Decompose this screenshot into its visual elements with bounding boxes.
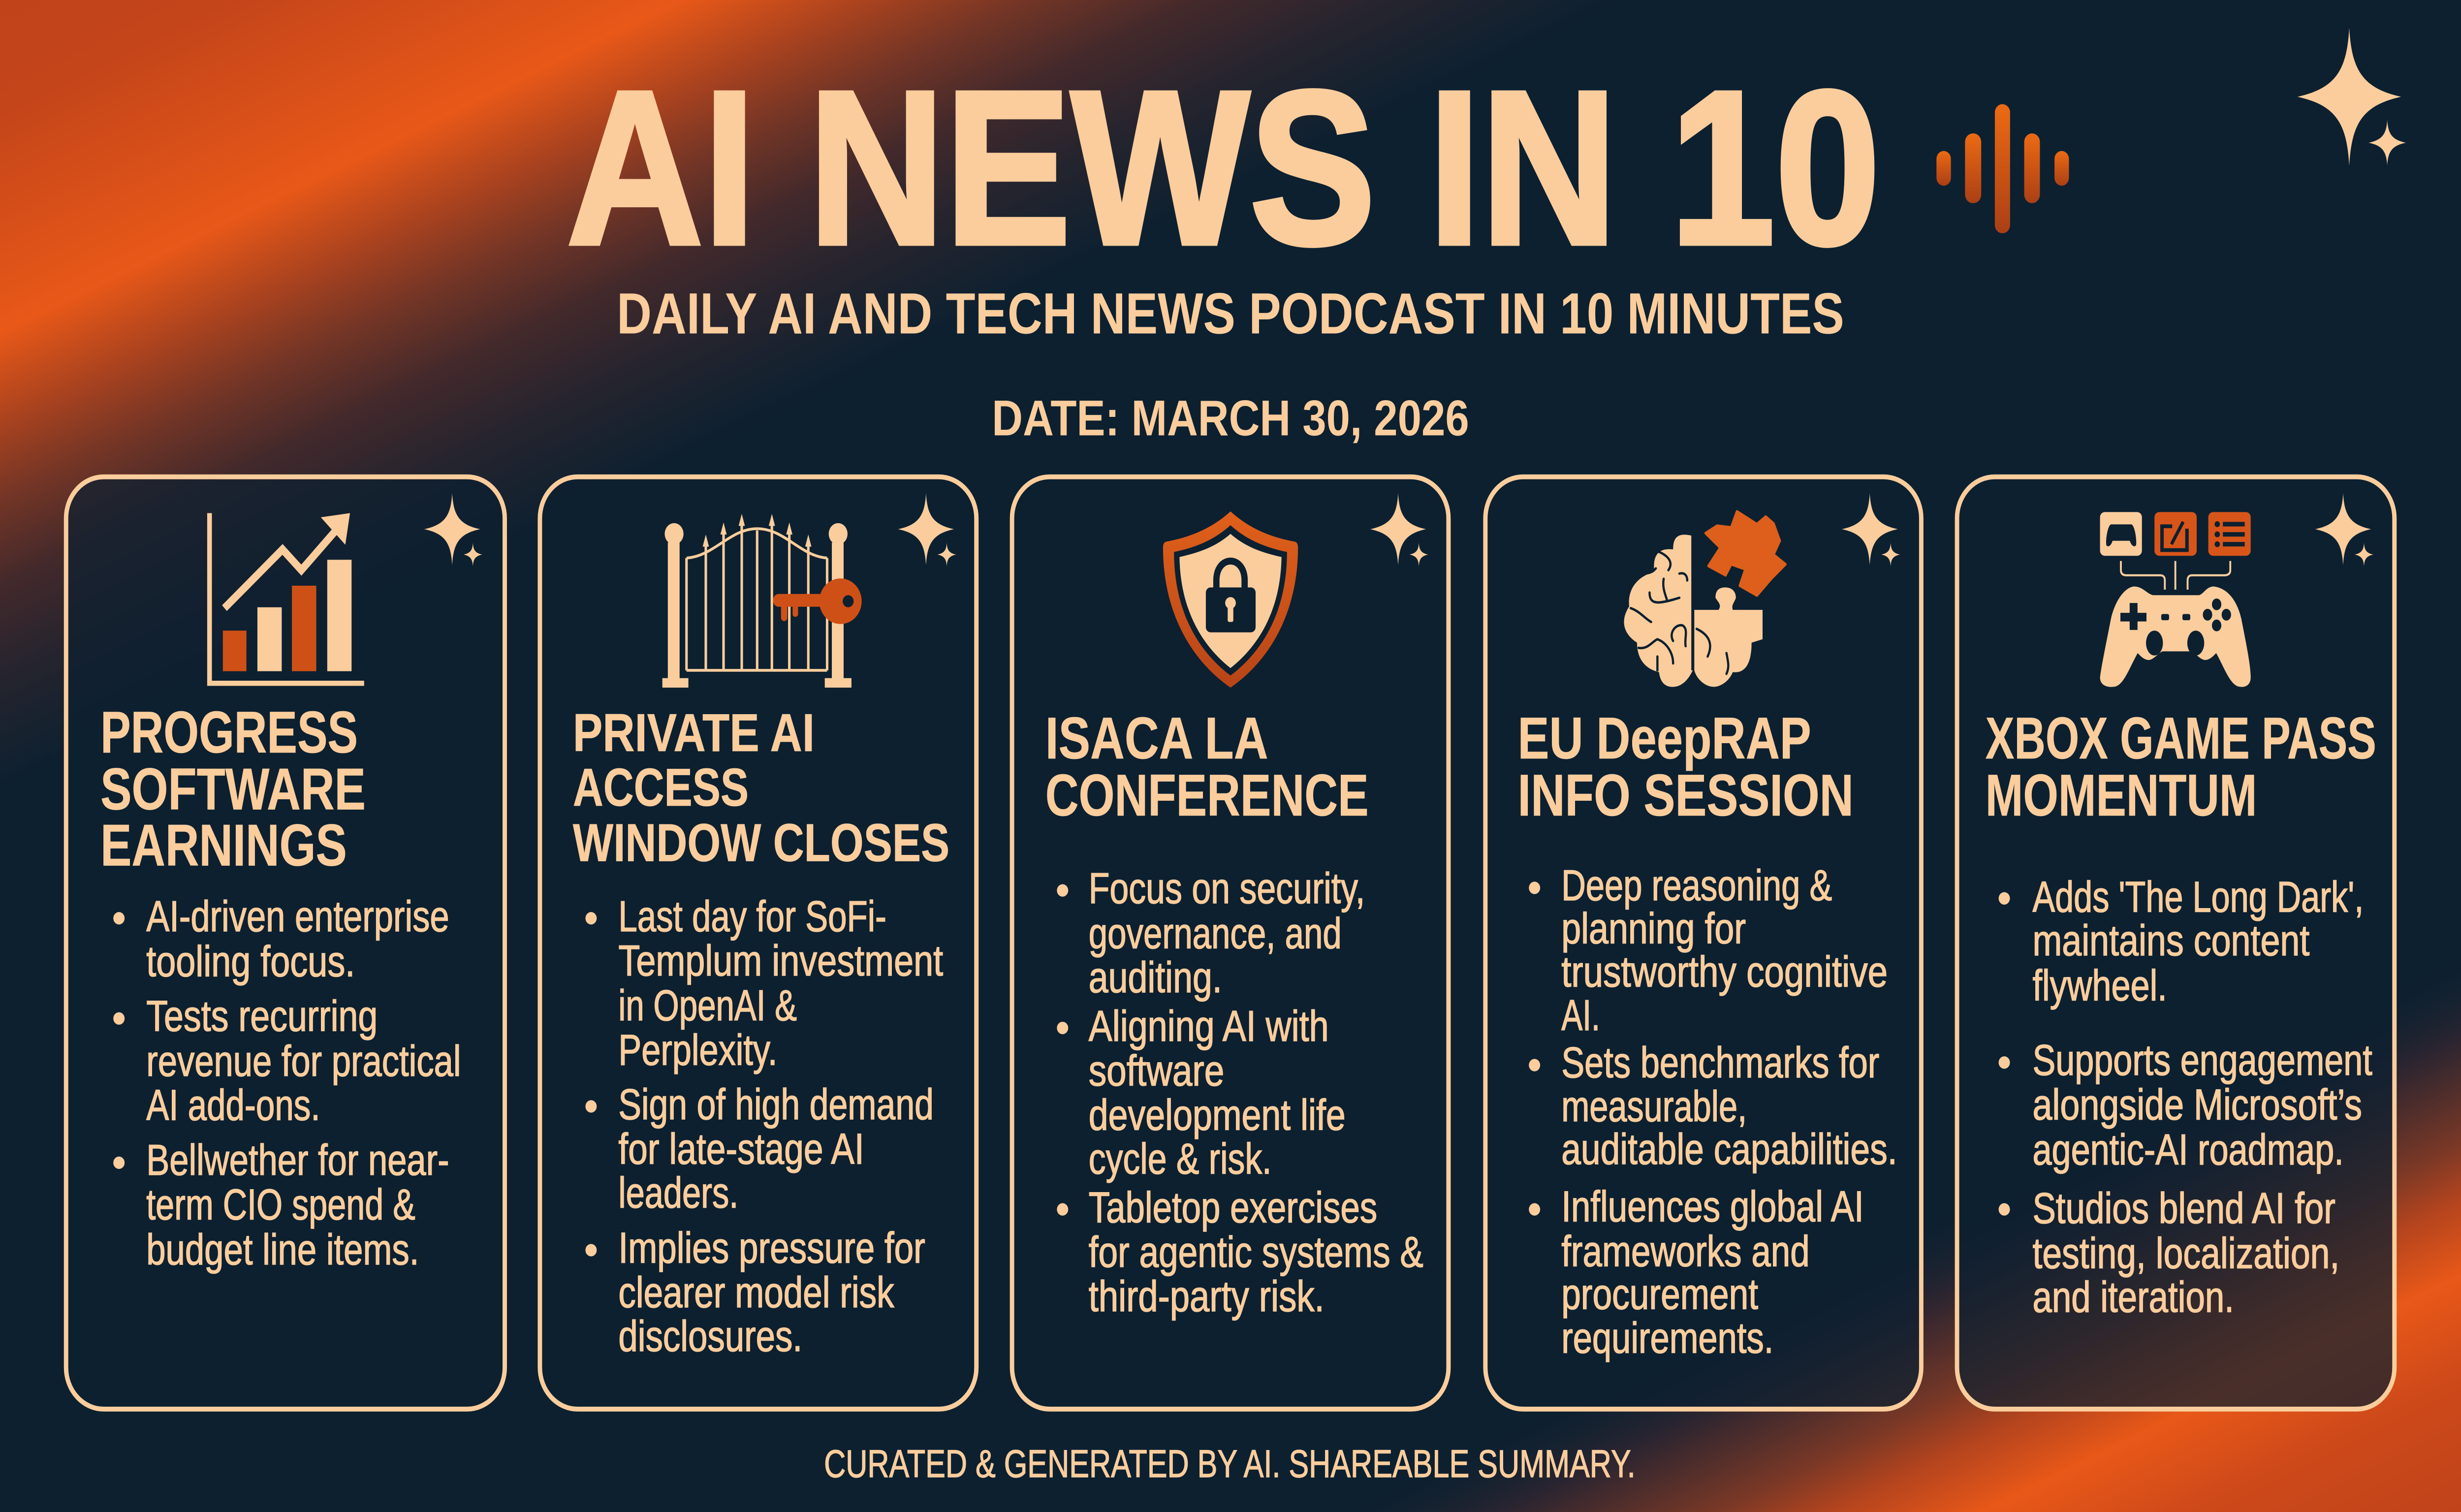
card frame [1012,477,1449,1409]
card frame [540,477,977,1409]
title: AI NEWS IN 10 [567,45,1880,290]
heading [1518,706,1854,828]
panel: Xbox Game Pass momentum [1957,477,2395,1409]
bullet list: Bellwether for near- [146,1135,449,1184]
bullet list: Tabletop exercises [1089,1183,1377,1231]
bullet list: auditing. [1089,953,1222,1002]
bullet list: Studios blend AI for [2032,1184,2335,1232]
bullet list: Deep reasoning & [1561,861,1832,910]
heading [573,703,949,873]
bullet list: revenue for practical [146,1037,461,1085]
bullet list: Focus on security, [1089,864,1365,913]
card frame [1485,477,1921,1409]
icon: sparkles [2315,493,2373,567]
bullet list: Influences global AI [1561,1182,1864,1231]
footer: CURATED & GENERATED BY AI. SHAREABLE SUMMARY. [824,1442,1636,1485]
bullet list: frameworks and [1561,1227,1810,1275]
bullet list: cycle & risk. [1089,1134,1272,1183]
bullet list: alongside Microsoft’s [2032,1080,2362,1129]
bullet list: in OpenAI & [618,981,797,1030]
icon: sparkles [1370,493,1428,567]
bullet list: procurement [1561,1270,1758,1319]
bullet list: flywheel. [2032,961,2167,1009]
bullet list: trustworthy cognitive [1561,947,1888,996]
heading: INFO SESSION [1518,763,1854,828]
bullet list: third-party risk. [1089,1272,1325,1321]
bullet list: Aligning AI with [1089,1002,1329,1050]
bullet list: testing, localization, [2032,1229,2339,1277]
heading: CONFERENCE [1045,763,1369,828]
bullet list [1529,861,1897,1362]
heading: ACCESS [573,758,749,818]
bullet list: for late-stage AI [618,1125,864,1173]
icon: sound waveform [1936,104,2069,233]
bullet list: Supports engagement [2032,1036,2372,1084]
icon: sparkles [1842,493,1900,567]
subtitle: DAILY AI AND TECH NEWS PODCAST IN 10 MINUTES [617,281,1844,346]
date: DATE: MARCH 30, 2026 [992,390,1469,446]
panel: progress software earnings [66,477,505,1409]
icon: gate and key [663,514,862,688]
bullet list [113,892,461,1274]
bullet list: AI-driven enterprise [146,892,449,941]
bullet list: tooling focus. [146,937,355,985]
bullet list: requirements. [1561,1314,1773,1362]
bullet list: auditable capabilities. [1561,1125,1897,1173]
heading [1986,706,2376,828]
bullet list: Last day for SoFi- [618,892,886,941]
bullet list: agentic-AI roadmap. [2032,1125,2344,1174]
heading: SOFTWARE [100,757,366,822]
bullet list: AI add-ons. [146,1081,320,1129]
panel: EU DeepRAP info session [1485,477,1921,1409]
icon: brain and puzzle piece [1624,511,1786,687]
bullet list: disclosures. [618,1312,802,1360]
bullet list: software [1089,1046,1224,1095]
icon: sparkles [424,493,482,567]
bullet list: Perplexity. [618,1026,777,1074]
heading: WINDOW CLOSES [573,813,949,873]
bullet list [1999,873,2372,1321]
bullet list: maintains content [2032,916,2309,965]
panel: ISACA LA conference [1012,477,1449,1409]
card frame [1957,477,2395,1409]
bullet list: Templum investment [618,936,943,985]
bullet list: governance, and [1089,909,1342,957]
bullet list: Implies pressure for [618,1224,925,1272]
bullet list: and iteration. [2032,1273,2234,1321]
bullet list: AI. [1561,991,1600,1040]
bullet list: measurable, [1561,1082,1747,1131]
bullet list: Adds 'The Long Dark', [2032,873,2364,921]
bullet list: leaders. [618,1168,738,1217]
bullet list [1057,864,1423,1321]
icon: game controller with tiles [2100,512,2251,687]
heading: PRIVATE AI [573,703,815,763]
bullet list: for agentic systems & [1089,1228,1423,1276]
heading: ISACA LA [1045,706,1268,771]
heading [1045,706,1369,828]
heading: PROGRESS [100,700,358,765]
bullet list: term CIO spend & [146,1180,415,1228]
heading [100,700,366,879]
bullet list: Tests recurring [146,992,378,1040]
icon: shield with padlock [1163,511,1298,688]
bullet list: clearer model risk [618,1268,895,1317]
card frame [66,477,505,1409]
heading: MOMENTUM [1986,763,2257,828]
bullet list: budget line items. [146,1225,419,1274]
heading: EARNINGS [100,813,347,879]
icon: sparkles [898,493,956,567]
bullet list: Sign of high demand [618,1080,934,1129]
bullet list: planning for [1561,904,1746,952]
heading: EU DeepRAP [1518,706,1811,771]
panel: private AI access window closes [540,477,977,1409]
icon: title sparkles [2298,28,2406,166]
bullet list: development life [1089,1091,1346,1139]
icon: rising bar chart [210,513,364,683]
bullet list: Sets benchmarks for [1561,1038,1879,1087]
icon: key [773,578,862,624]
heading: XBOX GAME PASS [1986,706,2376,771]
bullet list [585,892,943,1360]
